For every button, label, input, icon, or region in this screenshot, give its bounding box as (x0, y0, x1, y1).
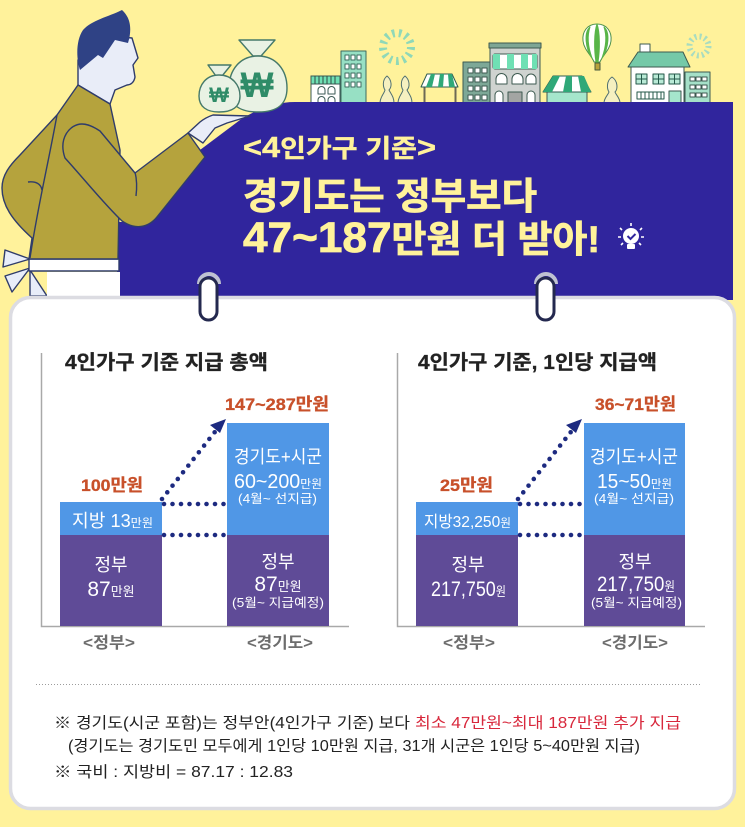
tree right (604, 77, 620, 103)
small money bag: ₩ (209, 84, 229, 107)
headline line one: 경기도는 정부보다 (243, 176, 537, 217)
chart title: 4인가구 기준, 1인당 지급액 (418, 351, 657, 374)
bar labels: (5월~ 지급예정) (232, 596, 324, 610)
bar labels (424, 447, 682, 610)
bar labels: 지방 13만원 (72, 511, 153, 531)
arrow (518, 419, 582, 499)
trees left (380, 76, 412, 103)
subheading: <4인가구 기준 > (243, 132, 436, 164)
bar labels: 정부 (451, 555, 485, 575)
hair (77, 10, 130, 70)
total labels: 36~71만원 (595, 395, 676, 414)
man presenting money bags (2, 10, 287, 296)
bar labels: 지방32,250원 (424, 513, 511, 531)
government bar stack (416, 502, 518, 626)
market stall left (421, 74, 458, 103)
bar labels: 경기도+시군 (590, 447, 678, 467)
note one (54, 714, 681, 732)
binder ring left (199, 274, 219, 320)
side building (685, 72, 710, 103)
axes (398, 353, 705, 626)
dotted guides (164, 504, 226, 535)
category labels: <정부> (83, 634, 135, 652)
bar labels: 217,750원 (597, 573, 675, 596)
small money bag (199, 65, 240, 112)
house with mint roof (628, 44, 690, 103)
chart: total payment for four-person household (42, 351, 349, 652)
bar labels: 15~50만원 (597, 471, 672, 493)
total labels: 147~287만원 (225, 395, 329, 414)
bar labels: 정부 (618, 552, 652, 572)
small shop building (311, 76, 340, 103)
grey green office (463, 62, 491, 103)
note one detail: (경기도는 경기도민 모두에게 1인당 10만원 지급, 31개 시군은 1인당 5~40만원 지급) (68, 737, 640, 755)
header text (243, 132, 600, 262)
large money bag: ₩ (240, 66, 274, 105)
dotted guides (520, 504, 583, 535)
Gyeonggi bar stack (584, 423, 685, 626)
total labels (440, 395, 676, 495)
government bar stack (60, 502, 162, 626)
jacket body (2, 85, 120, 259)
binder ring right (536, 274, 556, 320)
category labels: <경기도> (247, 634, 313, 652)
header navy banner (117, 102, 733, 300)
total labels: 25만원 (440, 476, 493, 495)
apron tie (3, 250, 47, 296)
firework left (383, 33, 411, 61)
note two: ※ 국비 : 지방비 = 87.17 : 12.83 (54, 763, 293, 781)
bar labels: 정부 (261, 552, 295, 572)
total labels: 100만원 (81, 476, 143, 495)
bar labels (72, 447, 324, 610)
head and neck (78, 36, 138, 104)
bar labels: (4월~ 선지급) (238, 492, 317, 506)
Gyeonggi bar stack (227, 423, 329, 626)
bar labels: 정부 (94, 555, 128, 575)
white content panel (10, 298, 734, 808)
bar labels: 87만원 (254, 573, 302, 596)
bar labels: 87만원 (87, 578, 135, 601)
jacket seam (28, 115, 57, 258)
bar labels: 217,750원 (431, 578, 506, 601)
chart: per-person payment (398, 351, 705, 652)
category labels: <정부> (443, 634, 495, 652)
note one: 최소 47만원~최대 187만원 추가 지급 (415, 714, 681, 732)
firework right (690, 36, 708, 56)
sleeve fold (135, 172, 137, 196)
bar labels: (4월~ 선지급) (594, 492, 674, 506)
note one: ※ 경기도(시군 포함)는 정부안(4인가구 기준) 보다 (54, 714, 410, 732)
bar labels: (5월~ 지급예정) (591, 596, 682, 610)
arrow (162, 419, 226, 499)
large money bag (229, 40, 287, 112)
market stall right (543, 76, 591, 103)
hand (188, 115, 250, 143)
category labels (83, 634, 313, 652)
footnotes (54, 714, 681, 781)
hot air balloon (583, 24, 611, 70)
total labels (81, 395, 329, 495)
apron (29, 259, 120, 296)
jacket arm (63, 124, 205, 227)
icon: light bulb (618, 223, 644, 249)
main grey shop building (489, 43, 541, 103)
town skyline illustration (311, 24, 710, 103)
bar labels: 경기도+시군 (234, 447, 322, 467)
bar labels: 60~200만원 (234, 471, 322, 493)
headline line two: 47~187만원 더 받아! (243, 214, 600, 262)
category labels: <경기도> (602, 634, 668, 652)
tall mint building (341, 51, 366, 103)
category labels (443, 634, 668, 652)
chart title: 4인가구 기준 지급 총액 (65, 351, 268, 374)
axes (42, 353, 349, 626)
